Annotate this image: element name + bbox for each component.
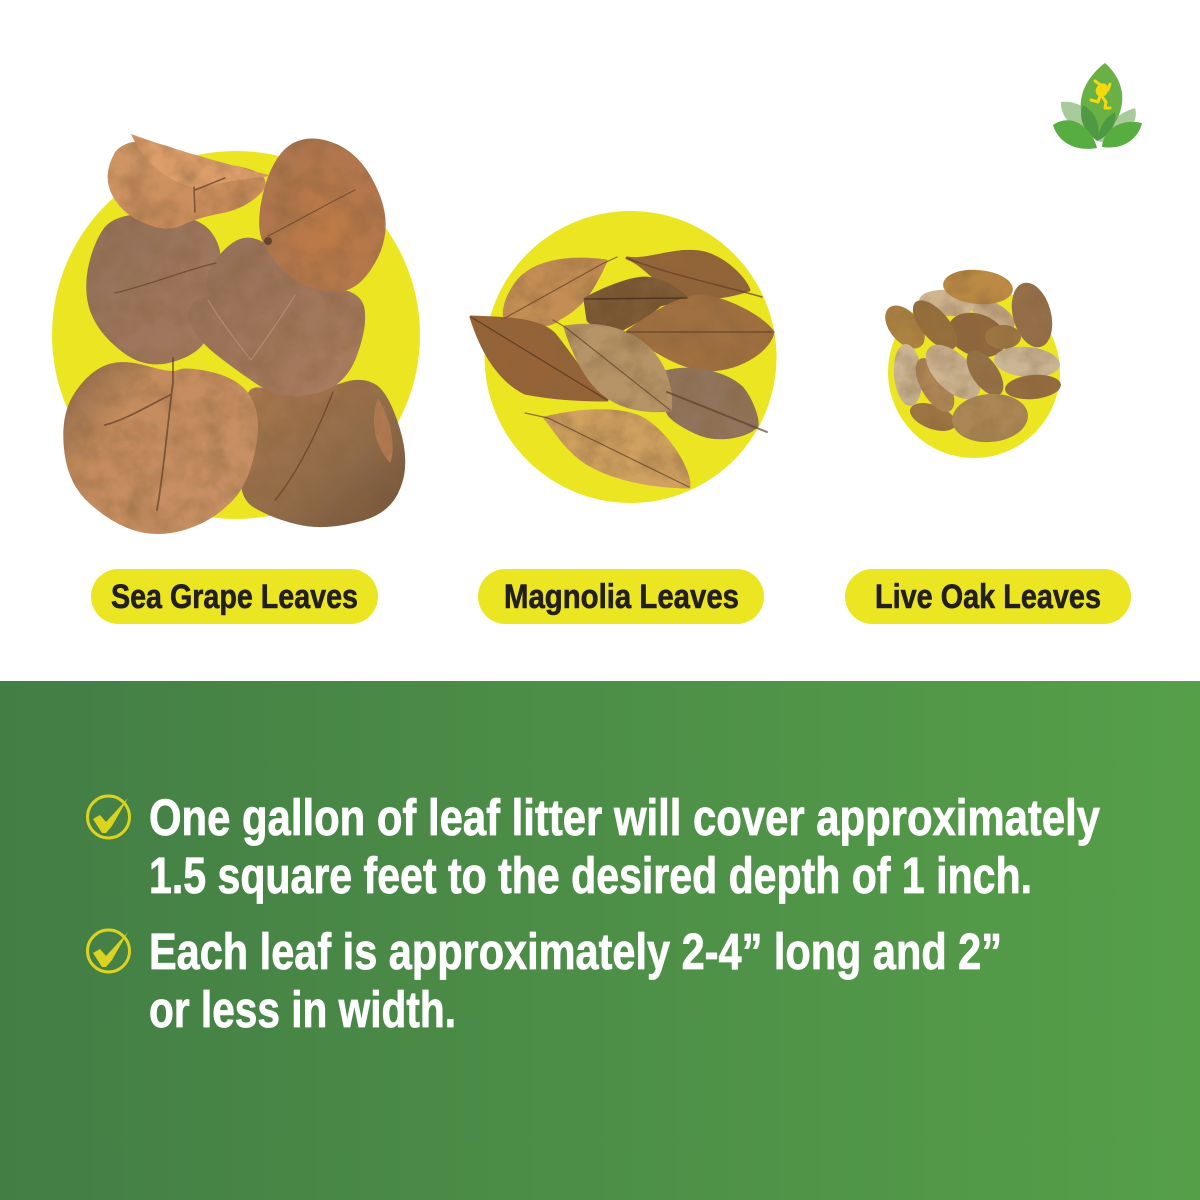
- yellow circle: live oak: [888, 286, 1060, 458]
- icon: brand leaf and frog logo: [1053, 63, 1142, 149]
- magnolia leaf pile: [471, 251, 773, 487]
- leaf: bottom right fold: [374, 398, 393, 463]
- text: leaf size fact: [149, 923, 1002, 1038]
- label: magnolia leaves: [478, 569, 764, 624]
- yellow circle: magnolia: [484, 211, 776, 503]
- panel: green facts band: [0, 681, 1200, 1200]
- leaf: bottom left: [67, 366, 255, 530]
- text: leaf size fact: or less in width.: [149, 981, 456, 1038]
- oak leaves cluster: [877, 267, 1062, 445]
- leaf veins: [105, 178, 355, 510]
- text: coverage fact: [149, 789, 1101, 904]
- icon: frog: [1091, 81, 1111, 108]
- leaf 8: [545, 411, 689, 487]
- leaf 7: [665, 369, 757, 438]
- text: leaf size fact: Each leaf is approximately 2-4” long and 2”: [149, 923, 1002, 980]
- leaf: bottom right: [244, 383, 402, 524]
- icon: checkmark 1: [88, 796, 130, 838]
- sea grape leaves group: [52, 134, 420, 530]
- magnolia midribs and stems: [471, 257, 772, 487]
- label: sea grape leaves: Sea Grape Leaves: [111, 578, 358, 616]
- label: magnolia leaves: Magnolia Leaves: [504, 578, 739, 616]
- panel: leaf comparison on white: [52, 63, 1142, 624]
- magnolia leaves group: [471, 211, 776, 503]
- live oak leaves group: [877, 267, 1062, 458]
- leaf 4: [627, 296, 773, 370]
- sea grape leaf pile: [67, 134, 402, 530]
- label: live oak leaves: [845, 569, 1131, 624]
- icon: checkmark 2: [88, 930, 130, 972]
- leaf: top left: [111, 145, 262, 225]
- leaf 6: [565, 325, 671, 411]
- leaf 3: [585, 278, 687, 332]
- leaf: center: [191, 241, 362, 393]
- yellow circle: sea grape: [52, 151, 420, 519]
- leaf 2: [627, 251, 749, 298]
- leaf: left middle: [90, 217, 217, 361]
- label: live oak leaves: Live Oak Leaves: [875, 578, 1101, 616]
- leaf 1: [504, 259, 606, 326]
- leaf: top left upper fold: [131, 134, 273, 188]
- label: sea grape leaves: [91, 569, 378, 624]
- leaf: top right: [263, 142, 382, 288]
- leaf 5: [471, 317, 607, 400]
